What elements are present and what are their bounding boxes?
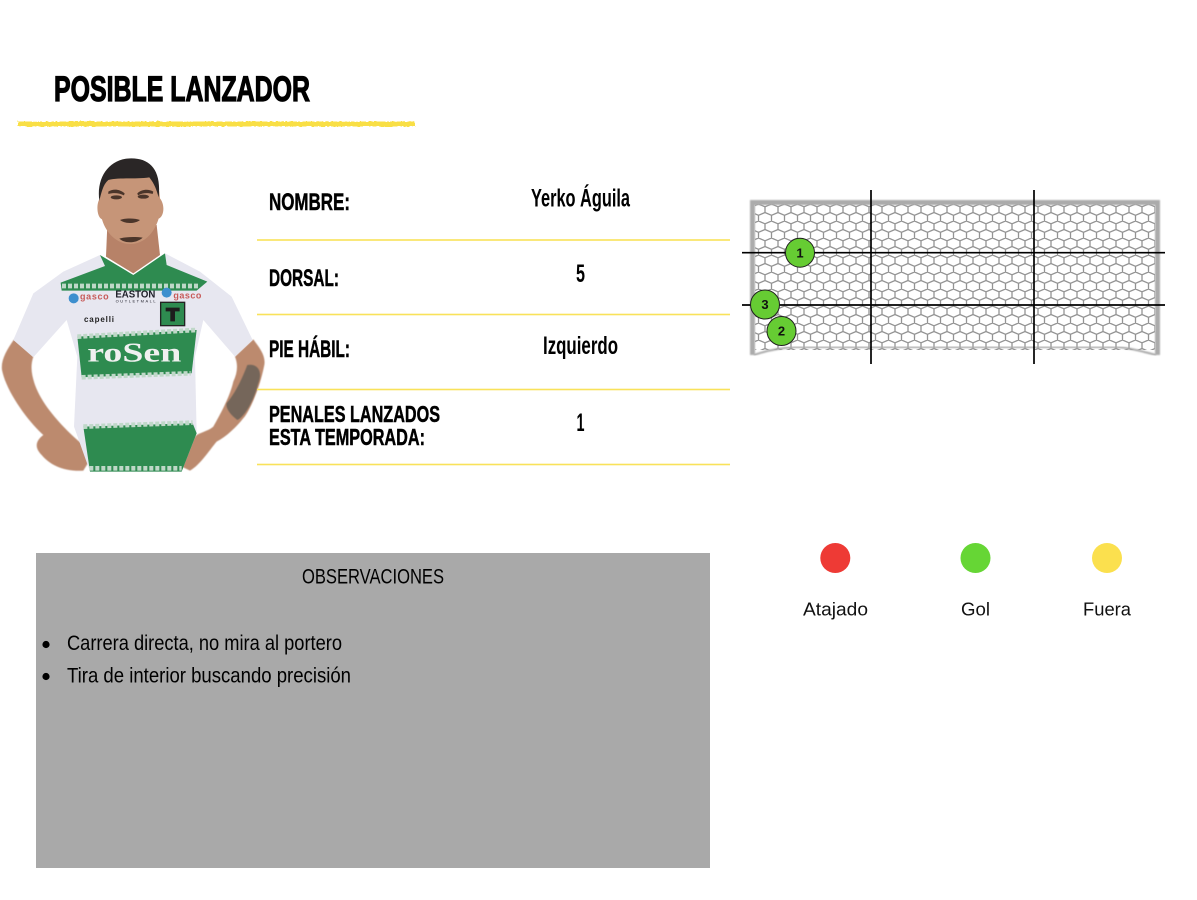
sponsor logos: EASTON	[115, 290, 155, 301]
goal net chart	[742, 190, 1165, 364]
hair	[99, 158, 159, 201]
player right arm	[178, 339, 265, 471]
jersey	[13, 253, 253, 472]
sponsor logos: gasco	[173, 291, 202, 301]
checker strips	[62, 286, 198, 468]
penalty marker 1: 1	[796, 245, 804, 260]
jersey collar and shoulder band	[61, 253, 207, 291]
rosen sponsor: roSen	[87, 338, 181, 368]
penalty marker 2	[767, 316, 796, 346]
legend: fuera	[1083, 543, 1132, 620]
facial features	[108, 190, 153, 242]
label: dorsal: DORSAL:	[269, 265, 339, 292]
player left arm	[2, 339, 95, 471]
goal base shadows	[754, 347, 1156, 355]
info row: pie habil	[269, 332, 618, 363]
observation 1: Carrera directa, no mira al portero	[67, 632, 342, 655]
label: penales lanzados: PENALES LANZADOS	[269, 401, 440, 427]
sponsor logos	[69, 288, 202, 324]
legend: gol: Gol	[961, 600, 990, 620]
jersey lower band	[83, 423, 197, 472]
legend: gol	[960, 543, 990, 620]
player photo	[2, 158, 265, 472]
sponsor logos: capelli	[84, 315, 114, 324]
title underline	[18, 122, 415, 126]
title: POSIBLE LANZADOR	[54, 70, 310, 109]
neck	[106, 225, 160, 273]
info row: nombre	[269, 184, 631, 216]
value: dorsal: 5	[576, 260, 585, 288]
label: nombre: NOMBRE:	[269, 189, 350, 216]
value: pie habil: Izquierdo	[543, 332, 618, 360]
value: nombre: Yerko Águila	[531, 184, 631, 212]
legend	[803, 543, 1132, 620]
label: pie habil: PIE HÁBIL:	[269, 335, 350, 363]
goal zone lines	[742, 190, 1165, 364]
head	[97, 170, 163, 244]
jersey chest band	[77, 330, 197, 377]
penalty marker 3: 3	[761, 297, 769, 312]
penalty marker 1	[786, 238, 814, 267]
info row: penales lanzados	[269, 401, 585, 450]
goal net mesh	[755, 204, 1155, 350]
penalty marker 3	[750, 290, 780, 319]
info row: dorsal	[269, 260, 585, 292]
legend: atajado	[803, 543, 868, 620]
panel: observaciones	[36, 553, 710, 868]
club crest	[161, 302, 185, 326]
arm tattoo	[226, 365, 260, 420]
observaciones heading: OBSERVACIONES	[302, 566, 444, 588]
sponsor logos: OUTLETMALL	[116, 299, 156, 304]
legend: atajado: Atajado	[803, 600, 868, 620]
legend: fuera: Fuera	[1083, 600, 1132, 620]
penalty marker 2: 2	[778, 324, 785, 339]
goal frame	[752, 202, 1158, 355]
label: penales lanzados: ESTA TEMPORADA:	[269, 424, 425, 450]
sponsor logos: gasco	[80, 291, 109, 301]
observation 2: Tira de interior buscando precisión	[67, 664, 351, 688]
value: penales lanzados: 1	[576, 409, 585, 437]
